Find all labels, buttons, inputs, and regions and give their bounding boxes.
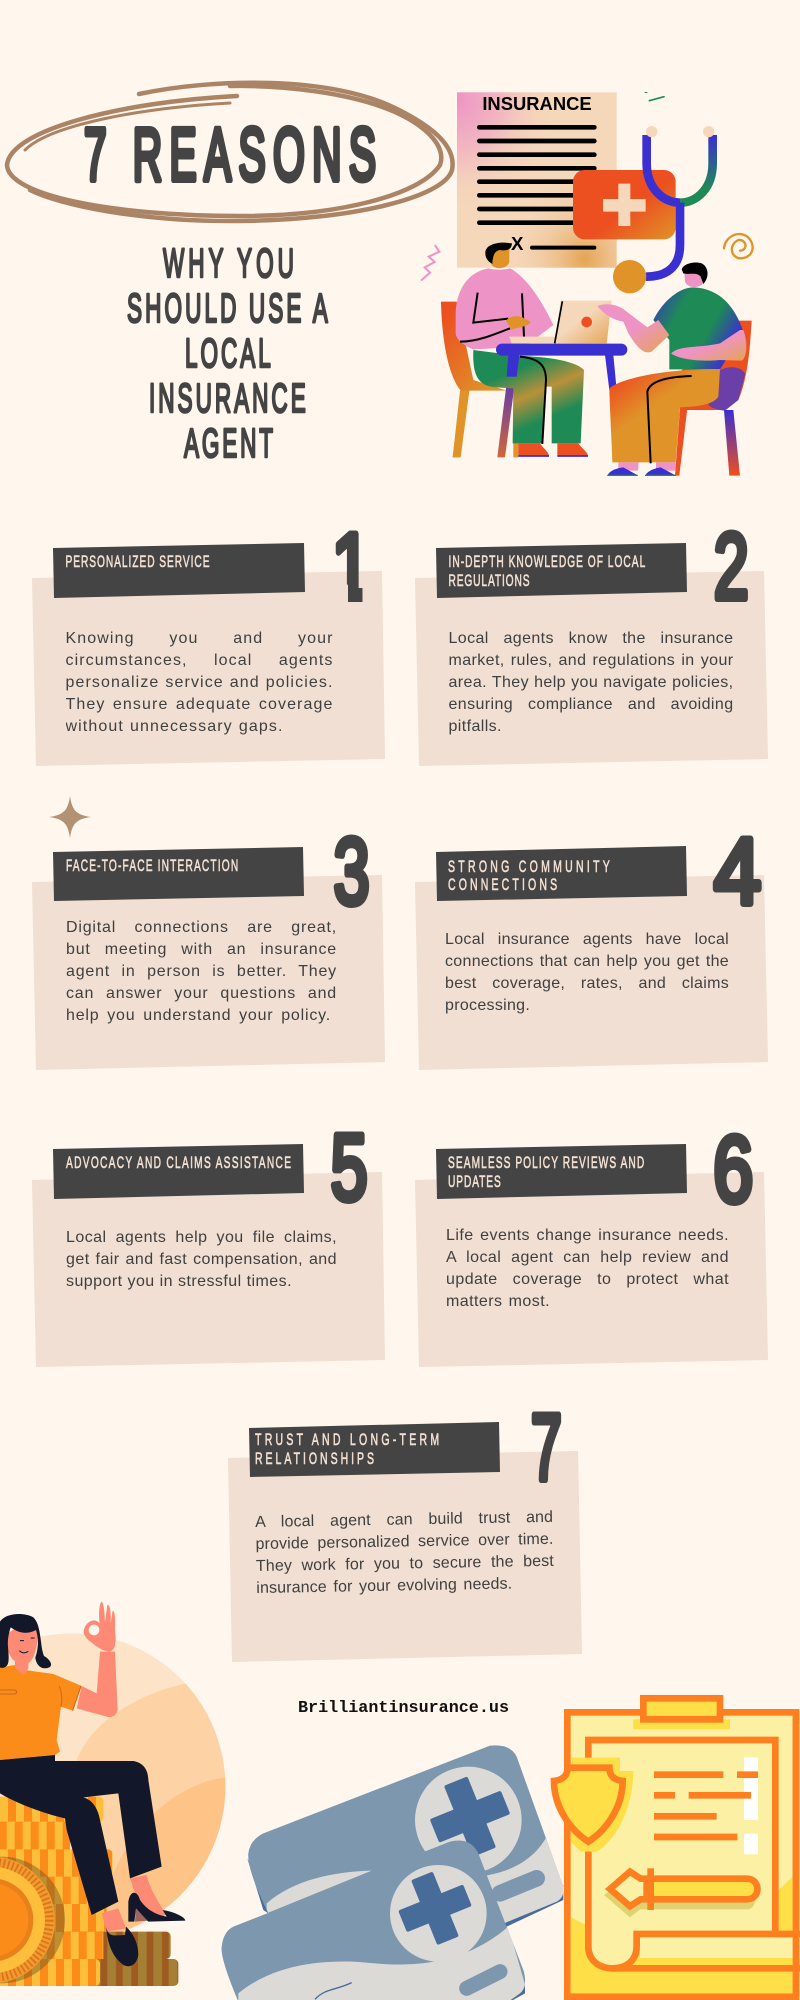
body text: Local insurance agents have local — [445, 931, 729, 948]
heading bar — [53, 543, 305, 598]
shield — [554, 1758, 633, 1852]
body text: circumstances, local agents — [66, 652, 334, 669]
body text: ensuring compliance and avoiding — [448, 696, 734, 713]
first aid box — [573, 170, 676, 239]
card panel — [32, 875, 385, 1070]
body text: Local agents know the insurance — [448, 630, 734, 647]
insurance document — [457, 92, 617, 268]
card 6: seamless policy reviews — [415, 1116, 768, 1367]
body text — [448, 628, 734, 740]
heading bar: FACE-TO-FACE INTERACTION — [66, 855, 238, 875]
card panel — [228, 1451, 582, 1662]
insurance cards — [217, 1740, 570, 2000]
paper fold — [610, 1712, 800, 1997]
card 7: trust and long-term relationships — [228, 1394, 582, 1662]
laptop — [509, 301, 612, 343]
sparkle star — [49, 796, 91, 838]
body text: best coverage, rates, and claims — [445, 975, 729, 992]
body text: A local agent can build trust and — [255, 1509, 553, 1531]
heading bar: RELATIONSHIPS — [255, 1448, 374, 1468]
card panel — [415, 875, 768, 1070]
card panel — [32, 571, 385, 766]
number 3: 3 — [334, 818, 370, 924]
illustration: woman sitting on coins — [0, 1602, 570, 2000]
heading bar — [436, 1144, 687, 1199]
heading bar — [436, 846, 687, 901]
title ellipse scribble — [7, 83, 453, 221]
body text: provide personalized service over time. — [255, 1531, 554, 1553]
card 3: face-to-face interaction — [32, 818, 385, 1070]
body text: area. They help you navigate policies, — [448, 674, 734, 691]
heading bar — [53, 847, 304, 901]
card panel — [415, 1172, 768, 1367]
card 5: advocacy and claims assistance — [32, 1114, 385, 1367]
heading bar — [53, 1144, 304, 1199]
body text — [255, 1507, 555, 1602]
body text: can answer your questions and — [66, 985, 337, 1002]
body text: They ensure adequate coverage — [66, 696, 334, 713]
body text: support you in stressful times. — [66, 1273, 292, 1290]
subtitle: why you should use a local insurance agent: WHY YOU — [163, 241, 294, 287]
number 1: 1 — [332, 514, 372, 618]
pen — [604, 1868, 757, 1917]
illustration: insurance consultation — [422, 92, 753, 476]
insurance document: INSURANCE — [482, 93, 592, 114]
peach circle — [0, 1634, 226, 1932]
subtitle: why you should use a local insurance agent — [127, 241, 328, 467]
body text — [66, 1227, 337, 1295]
left chair — [441, 302, 518, 457]
number 4: 4 — [714, 818, 761, 924]
yellow lower shading — [571, 1877, 793, 1993]
body text — [66, 917, 337, 1029]
body text — [66, 628, 334, 740]
body text: personalize service and policies. — [66, 674, 334, 691]
heading bar: REGULATIONS — [448, 570, 530, 590]
title: 7 REASONS: 7 REASONS — [84, 113, 376, 196]
woman — [0, 1602, 185, 1966]
heading bar: ADVOCACY AND CLAIMS ASSISTANCE — [66, 1152, 291, 1172]
body text: get fair and fast compensation, and — [66, 1251, 337, 1268]
website url: Brilliantinsurance.us — [298, 1699, 509, 1718]
heading bar: STRONG COMMUNITY — [448, 856, 610, 876]
subtitle: why you should use a local insurance agent: SHOULD USE A — [127, 286, 328, 332]
clip — [633, 1698, 730, 1729]
right chair — [675, 321, 752, 476]
heading bar: CONNECTIONS — [448, 874, 557, 894]
right person — [597, 263, 746, 476]
body text: agent in person is better. They — [66, 963, 337, 980]
body text: update coverage to protect what — [446, 1271, 729, 1288]
subtitle: why you should use a local insurance agent: LOCAL — [185, 331, 271, 377]
card 2: in-depth knowledge — [415, 514, 768, 766]
subtitle: why you should use a local insurance agent: AGENT — [184, 421, 273, 467]
paper sheet — [588, 1740, 775, 1968]
card 1: personalized service — [32, 514, 385, 766]
insurance document: X — [511, 233, 524, 254]
number 6: 6 — [713, 1116, 753, 1222]
back card — [247, 1745, 564, 1927]
number 7: 7 — [531, 1394, 562, 1500]
body text: without unnecessary gaps. — [66, 718, 284, 735]
decorative squiggles — [422, 92, 753, 280]
big coin — [0, 1857, 65, 1983]
body text: Life events change insurance needs. — [446, 1227, 729, 1244]
body text: matters most. — [446, 1293, 550, 1310]
number 2: 2 — [714, 514, 749, 618]
number 5: 5 — [331, 1114, 368, 1220]
body text: Local agents help you file claims, — [66, 1229, 337, 1246]
subtitle: why you should use a local insurance agent: INSURANCE — [149, 376, 306, 422]
body text: Digital connections are great, — [66, 919, 337, 936]
clipboard body — [567, 1712, 796, 1997]
coin stacks — [0, 1797, 178, 1986]
heading bar: IN-DEPTH KNOWLEDGE OF LOCAL — [448, 551, 645, 571]
card 4: strong community connections — [415, 818, 768, 1070]
left person — [456, 243, 588, 456]
stethoscope — [613, 126, 714, 293]
heading bar: UPDATES — [448, 1171, 501, 1191]
body text — [446, 1225, 729, 1315]
body text: processing. — [445, 997, 530, 1014]
text lines — [654, 1757, 758, 1854]
heading bar — [436, 543, 687, 598]
body text: Knowing you and your — [66, 630, 334, 647]
body text: insurance for your evolving needs. — [256, 1576, 512, 1597]
illustration: clipboard with shield and pen — [554, 1698, 800, 1997]
heading bar — [249, 1422, 500, 1477]
body text — [445, 929, 729, 1019]
heading bar: TRUST AND LONG-TERM — [255, 1429, 439, 1449]
heading bar: PERSONALIZED SERVICE — [66, 551, 210, 571]
body text: market, rules, and regulations in your — [448, 652, 734, 669]
body text: help you understand your policy. — [66, 1007, 331, 1024]
body text: pitfalls. — [448, 718, 502, 735]
card panel — [415, 571, 768, 766]
body text: but meeting with an insurance — [66, 941, 337, 958]
card panel — [32, 1172, 385, 1367]
body text: They work for you to secure the best — [256, 1553, 554, 1575]
heading bar: SEAMLESS POLICY REVIEWS AND — [448, 1152, 644, 1172]
body text: A local agent can help review and — [446, 1249, 729, 1266]
front card — [217, 1833, 533, 2000]
body text: connections that can help you get the — [445, 953, 729, 970]
table — [496, 344, 627, 390]
